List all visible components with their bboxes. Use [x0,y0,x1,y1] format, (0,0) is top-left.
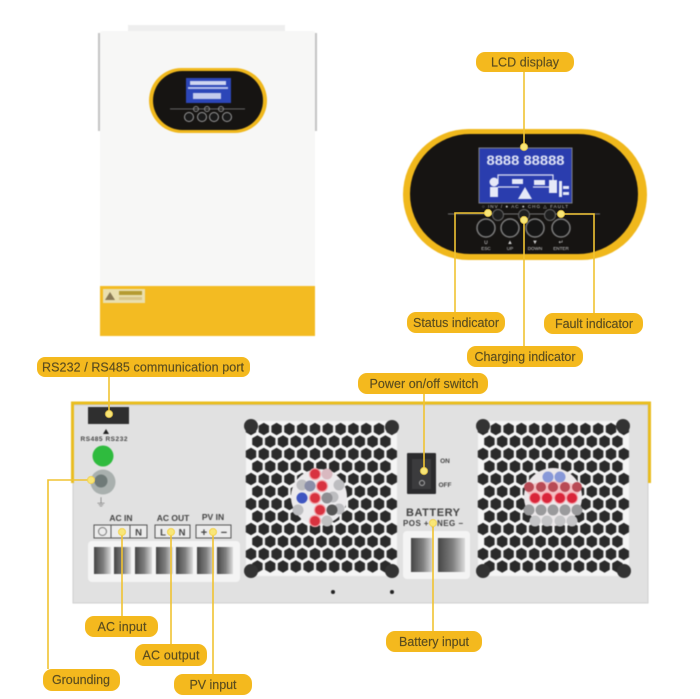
caution label [103,289,145,303]
small indicators [194,106,224,112]
left fan grille [244,416,399,579]
button captions: DOWN [528,246,542,251]
callout: Battery input: Battery input [399,635,470,649]
leader: AC input [118,528,126,616]
callout: Status indicator: Status indicator [413,316,499,330]
yellow top edge [72,403,650,483]
rear panel [73,405,648,603]
leader: fault indicator [558,210,594,314]
callout: Power on/off switch [358,373,488,394]
AC out terminal labels: AC OUT [157,513,190,523]
callout: PV input [174,674,252,695]
callout: AC output: AC output [142,648,200,662]
leader: LCD display [520,72,528,150]
indicator lights [492,210,556,220]
PV in terminal labels: − [221,527,227,539]
callout: Grounding [43,669,120,691]
leader: battery input [430,520,436,631]
callout: AC output [135,644,207,666]
leader: AC output [168,528,174,644]
small LCD [186,78,231,103]
leader: communication port [106,377,112,418]
AC out terminal labels: L [160,528,166,538]
AC in terminal labels [94,513,147,538]
callout: Charging indicator [467,346,583,367]
small buttons [184,112,232,122]
small control panel [149,68,267,133]
communication port [80,407,129,443]
callout: AC input: AC input [98,620,147,634]
button captions: UP [507,246,513,251]
leader: status indicator [455,210,492,313]
panel bezel [403,129,647,260]
battery terminal: BATTERY [406,507,461,519]
callout: RS232 / RS485 communication port: RS232 / RS485 communication port [42,360,245,374]
callout: Power on/off switch: Power on/off switch [370,377,479,391]
leader: power switch [420,394,428,474]
callout: LCD display: LCD display [491,56,560,70]
leader: PV input [210,528,216,674]
right fan grille [476,416,631,579]
power switch: OFF [438,482,452,489]
rear view of inverter [72,403,650,603]
callout: AC input [85,616,158,637]
button captions: ENTER [553,246,569,251]
AC out terminal labels [155,513,190,538]
front view of inverter [98,25,317,336]
mounting holes [331,590,335,594]
LCD screen [479,148,572,203]
AC in terminal labels: AC IN [109,513,133,523]
panel face [410,134,638,254]
communication port: RS485 RS232 [80,436,128,443]
power switch: ON [440,458,450,465]
button captions: ▲ [507,240,513,246]
leader lines and anchor dots [48,72,594,674]
callout: RS232 / RS485 communication port [37,357,250,377]
AC in terminal labels: N [135,528,142,538]
side flanges [98,33,100,131]
ground screw: ⏚ [96,496,106,509]
LCD screen: 8888 88888 [486,152,565,168]
AC out terminal labels: N [179,528,186,538]
button captions: ∪ [484,240,488,246]
terminal block [88,541,240,582]
leader: charging indicator [520,216,528,346]
white enclosure [100,31,315,287]
button captions [481,240,569,251]
right fan hub [524,468,582,526]
PV in terminal labels: PV IN [202,512,224,522]
leader: grounding [48,476,94,669]
PV in terminal labels [196,512,231,539]
yellow base [100,286,315,336]
button captions: ▼ [532,240,538,246]
callout: PV input: PV input [190,678,237,692]
indicator captions: ○ INV / ● AC ● CHG △ FAULT [482,204,568,209]
green indicator [92,446,114,466]
battery terminal [403,507,470,579]
left fan hub [291,468,347,526]
callout: Battery input [386,631,482,652]
PV in terminal labels: + [201,527,207,539]
callout: Fault indicator [544,313,643,334]
callout: Grounding: Grounding [52,673,110,687]
callout: LCD display [476,52,574,72]
button captions: ↵ [558,240,564,246]
callout: Fault indicator: Fault indicator [555,317,633,331]
button captions: ESC [481,246,491,251]
buttons [477,219,570,237]
callout: Charging indicator: Charging indicator [474,350,576,364]
enlarged control panel [403,129,647,260]
top lip [128,25,285,32]
power switch [407,453,452,494]
callout: Status indicator [407,312,505,333]
ground screw [90,470,116,509]
battery terminal: POS + | NEG − [403,519,463,528]
